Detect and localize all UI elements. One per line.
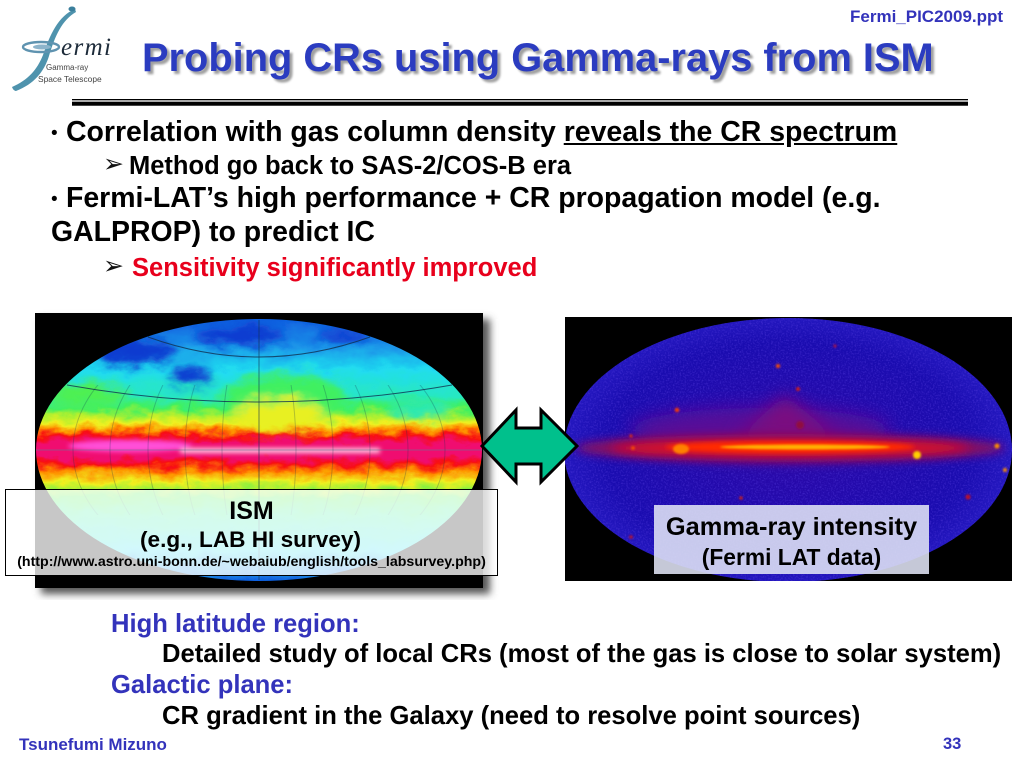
icon: Fermi logo: Space Telescope [38,74,102,84]
bullet text block: ➢ [103,250,124,280]
chart: gamma-ray all-sky map [565,317,1012,581]
bottom notes [111,610,1001,730]
bullet 2: Fermi-LAT’s high performance + CR propagation model (e.g. [66,182,880,214]
sub-bullet 1: Method go back to SAS-2/COS-B era [129,152,571,180]
page number: 33 [943,735,961,753]
file tag: Fermi_PIC2009.ppt [850,7,1003,26]
bullet text block: ➢ [103,149,124,178]
galactic plane detail: CR gradient in the Galaxy (need to resolve point sources) [162,702,860,730]
icon: Fermi logo: Gamma-ray [46,63,88,72]
title: Probing CRs using Gamma-rays from ISM [142,36,934,80]
ISM heading: ISM [229,497,274,525]
bullet 1: • [51,122,58,144]
double-headed arrow [480,406,579,486]
survey URL: (http://www.astro.uni-bonn.de/~webaiub/english/tools_labsurvey.php) [17,554,486,570]
Gamma-ray label box [654,505,929,574]
bullet 1: Correlation with gas column density reveals the CR spectrum [66,116,897,148]
high latitude detail: Detailed study of local CRs (most of the gas is close to solar system) [162,640,1001,668]
bullet 2 continuation: GALPROP) to predict IC [51,216,375,248]
survey name: (e.g., LAB HI survey) [140,527,361,552]
chart: ISM all-sky map [35,313,496,600]
ISM label box [5,489,498,576]
gamma heading: Gamma-ray intensity [666,513,917,541]
bullet 2: • [51,188,58,210]
icon: Fermi logo [12,6,111,91]
bullet text block [51,116,898,282]
author: Tsunefumi Mizuno [19,735,167,754]
icon: Fermi logo: ermi [61,34,111,61]
high latitude heading: High latitude region: [111,610,360,638]
gamma subtitle: (Fermi LAT data) [702,544,881,570]
sub-bullet 2: Sensitivity significantly improved [132,254,537,282]
galactic plane heading: Galactic plane: [111,671,293,699]
title rule [72,99,968,106]
